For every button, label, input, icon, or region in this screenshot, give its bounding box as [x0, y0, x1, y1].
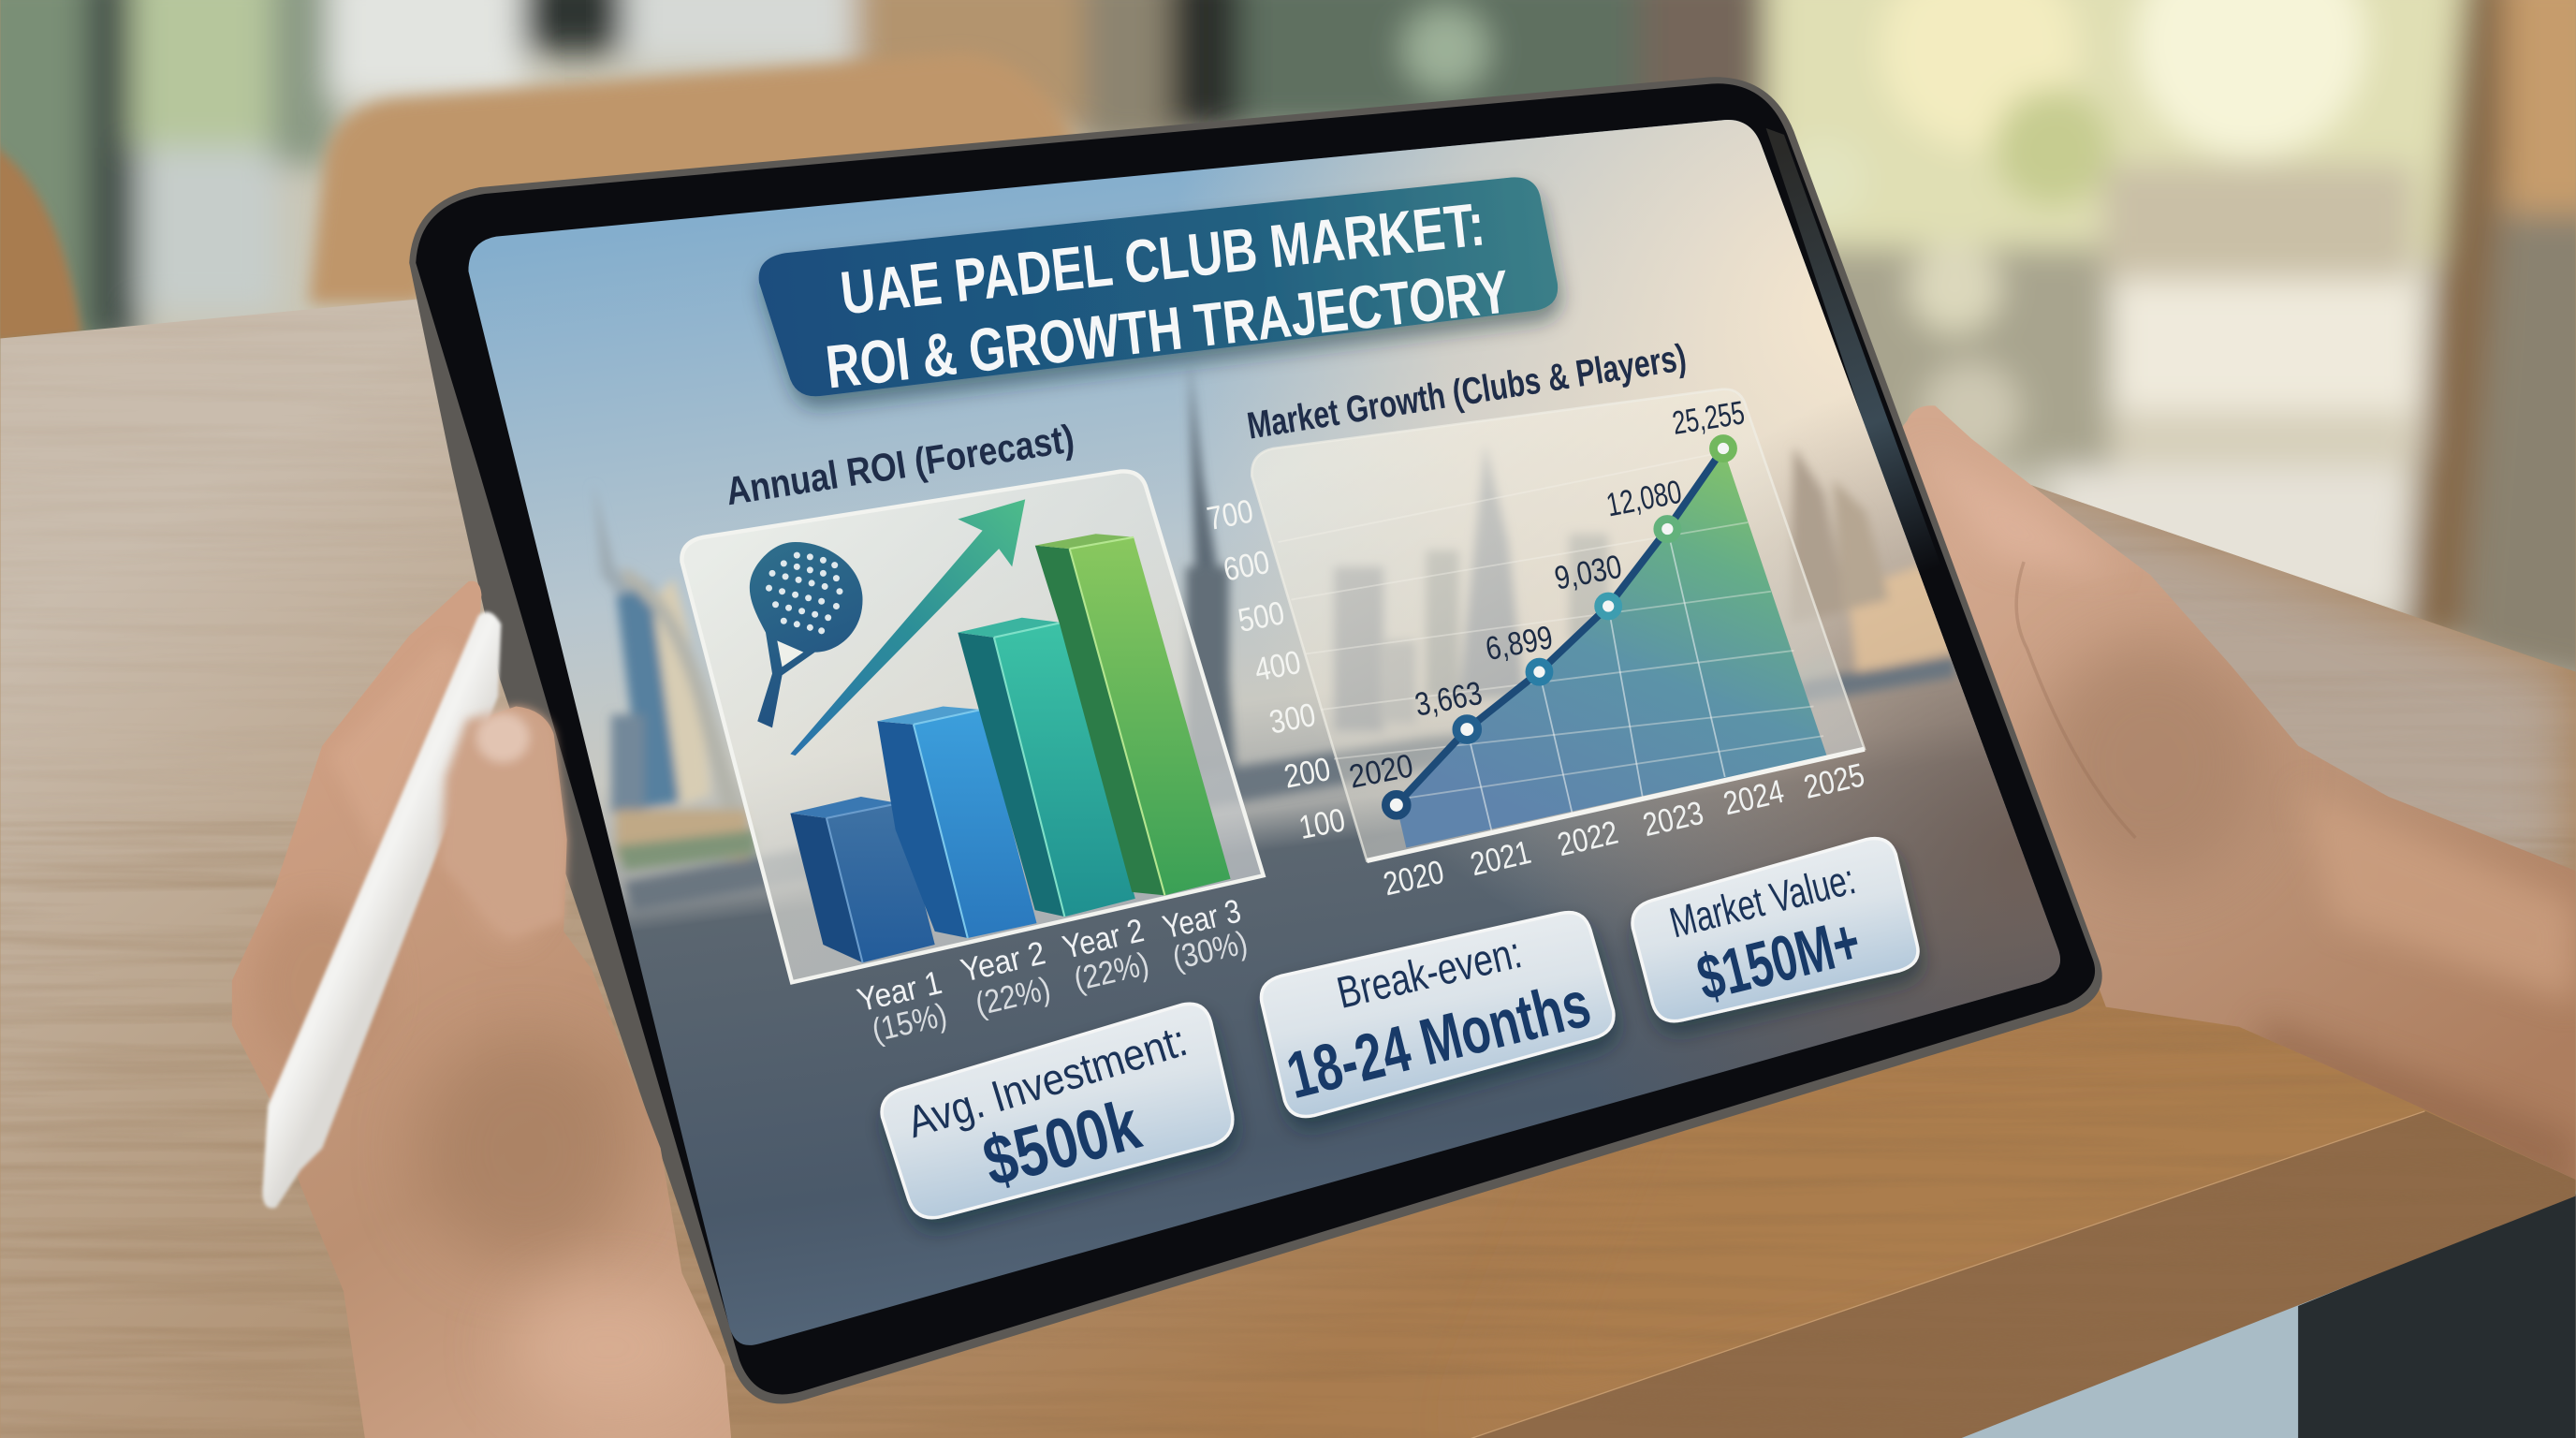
callout: market value — [1632, 839, 1918, 1021]
data labels: 25,255 — [1670, 394, 1747, 442]
callout: market value: Market Value: — [1665, 855, 1860, 946]
y axis labels: 400 — [1251, 644, 1304, 688]
chart card — [681, 471, 1264, 982]
tablet screen — [444, 82, 2102, 1380]
bar labels: (22%) — [1071, 946, 1152, 998]
callout: average investment: $500k — [975, 1084, 1149, 1201]
data labels: 6,899 — [1483, 619, 1556, 668]
arrow: growth trend — [790, 499, 1025, 756]
table front edge — [1462, 1101, 2576, 1438]
y axis labels: 300 — [1266, 697, 1319, 741]
data labels: 9,030 — [1552, 549, 1625, 597]
card bottom edge — [1367, 749, 1865, 860]
x axis labels: 2022 — [1554, 814, 1621, 863]
screen wallpaper: blurred Dubai skyline — [593, 361, 1971, 912]
x axis labels: 2021 — [1467, 834, 1534, 883]
title text: UAE PADEL CLUB MARKET: — [837, 189, 1488, 328]
x axis labels: 2023 — [1640, 795, 1707, 844]
bar labels: Year 2 — [958, 934, 1048, 990]
bar labels: (30%) — [1169, 924, 1251, 976]
callout: average investment: Avg. Investment: — [901, 1016, 1193, 1148]
line chart card — [1251, 389, 1865, 860]
callout: market value: $150M+ — [1690, 904, 1867, 1014]
callout: break-even — [1261, 913, 1614, 1117]
heading: annual ROI: Annual ROI (Forecast) — [723, 416, 1077, 513]
data labels: 12,080 — [1603, 474, 1685, 524]
x axis labels: 2025 — [1800, 756, 1868, 806]
chart gridlines — [1278, 452, 1823, 799]
bar: year 4 — [1035, 534, 1231, 895]
y axis labels: 100 — [1296, 801, 1348, 846]
area under line — [1397, 448, 1827, 847]
x axis labels — [1380, 756, 1868, 902]
bar: year 3 — [958, 618, 1135, 917]
chair back — [309, 52, 1084, 304]
panel: annual ROI forecast — [681, 416, 1264, 1049]
bar labels: Year 3 — [1160, 892, 1244, 946]
title banner — [759, 177, 1558, 402]
x axis labels: 2024 — [1720, 773, 1788, 822]
y axis labels: 200 — [1281, 751, 1333, 796]
trend line — [1397, 448, 1723, 805]
data labels — [1346, 394, 1747, 796]
bar: year 2 — [877, 707, 1037, 938]
bar labels: (15%) — [869, 996, 950, 1049]
left chair — [0, 139, 82, 345]
tablet body — [409, 77, 2102, 1403]
title text: ROI & GROWTH TRAJECTORY — [823, 257, 1513, 402]
wooden table top — [0, 296, 2576, 1438]
callout: break-even: 18-24 Months — [1280, 966, 1597, 1112]
bar labels — [854, 892, 1251, 1049]
panel: market growth — [1204, 335, 1868, 902]
data labels: 3,663 — [1412, 675, 1486, 724]
y axis labels: 500 — [1236, 594, 1287, 639]
bar: year 1 — [790, 797, 935, 962]
title text — [823, 189, 1513, 402]
right hand and forearm — [1873, 394, 2576, 1199]
left hand — [213, 559, 755, 1438]
thumb over stylus — [441, 707, 567, 936]
data points — [1385, 439, 1734, 815]
x axis labels: 2020 — [1380, 854, 1447, 902]
y axis labels: 700 — [1204, 492, 1256, 537]
bar labels: Year 2 — [1060, 912, 1148, 966]
floor and dark table legs lower right — [1954, 1191, 2576, 1438]
y axis labels: 600 — [1221, 544, 1273, 588]
callout: break-even: Break-even: — [1333, 928, 1526, 1019]
stylus — [262, 611, 501, 1208]
y axis labels — [1204, 492, 1348, 846]
callout: average investment — [882, 1004, 1233, 1218]
heading: market growth: Market Growth (Clubs & Players) — [1244, 335, 1689, 448]
data labels: 2020 — [1346, 747, 1416, 796]
icon: padel racket — [750, 542, 863, 727]
bar labels: Year 1 — [854, 964, 945, 1019]
bar labels: (22%) — [972, 970, 1054, 1023]
screen wallpaper: sky and water — [444, 82, 2102, 1380]
